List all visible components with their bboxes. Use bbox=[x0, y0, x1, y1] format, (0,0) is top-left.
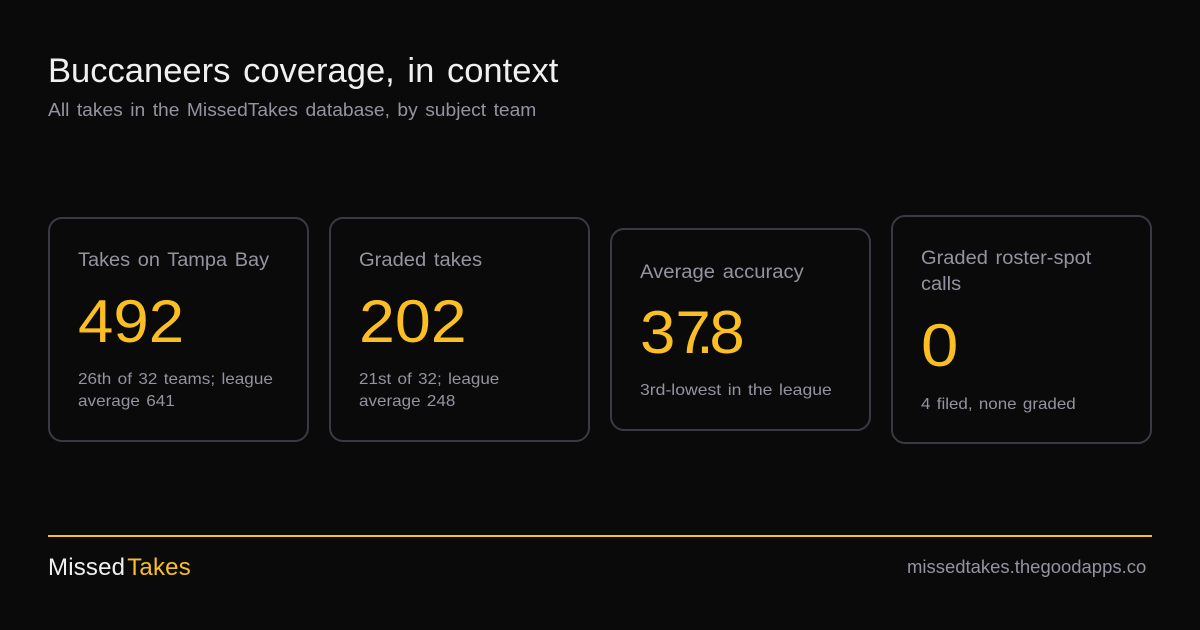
label: average accuracy: Average accuracy bbox=[640, 262, 804, 283]
title: Buccaneers coverage, in context bbox=[48, 52, 558, 90]
note: rank and league average bbox=[78, 371, 273, 410]
label: graded roster-spot calls bbox=[921, 248, 1092, 295]
note: rank and league average bbox=[359, 371, 499, 410]
value: 37.8: 37.8 bbox=[640, 299, 745, 366]
label: takes on Tampa Bay: Takes on Tampa Bay bbox=[78, 250, 269, 271]
note: rank and league average: average 641 bbox=[78, 393, 175, 410]
label: graded roster-spot calls: calls bbox=[921, 274, 961, 295]
label: graded takes: Graded takes bbox=[359, 250, 482, 271]
value: 202: 202 bbox=[359, 288, 467, 355]
value: 492: 492 bbox=[78, 288, 184, 355]
panel: graded roster-spot calls bbox=[891, 215, 1152, 444]
note: league rank: 3rd-lowest in the league bbox=[640, 382, 832, 399]
note: filed count: 4 filed, none graded bbox=[921, 396, 1076, 413]
value: 0: 0 bbox=[921, 312, 958, 379]
note: rank and league average: 21st of 32; league bbox=[359, 371, 499, 388]
panel: average accuracy bbox=[610, 228, 871, 431]
label: graded roster-spot calls: Graded roster-spot bbox=[921, 248, 1091, 269]
note: rank and league average: average 248 bbox=[359, 393, 455, 410]
note: rank and league average: 26th of 32 teams; league bbox=[78, 371, 273, 388]
subtitle: All takes in the MissedTakes database, by subject team bbox=[48, 100, 536, 120]
panel: takes on Tampa Bay bbox=[48, 217, 309, 442]
site url: missedtakes.thegoodapps.co bbox=[907, 557, 1146, 577]
brand wordmark: MissedTakes bbox=[48, 554, 191, 581]
footer rule bbox=[48, 535, 1152, 537]
panel: graded takes bbox=[329, 217, 590, 442]
